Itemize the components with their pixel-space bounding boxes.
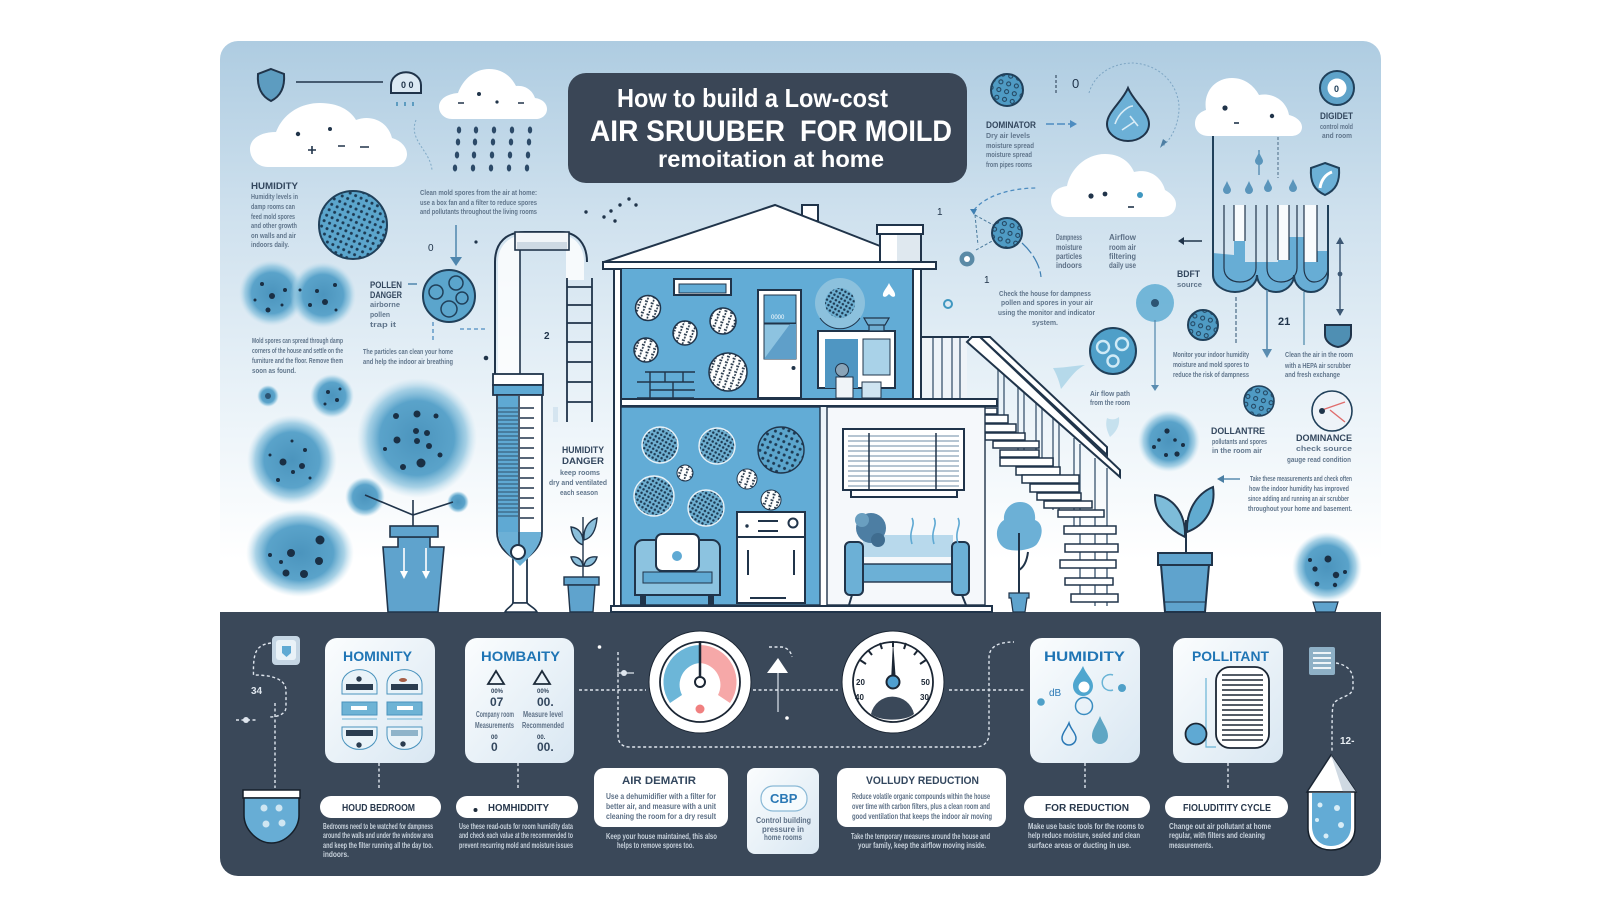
text: below volluty: your family, keep the airflow moving inside. [858,841,986,850]
text blocks: under spore clusters [252,336,453,375]
gauge: pressure dial: 20 [856,678,865,687]
icon: top-left device bottom band [272,636,300,665]
text: under pills left [323,822,573,859]
thermometer: 2 [544,331,550,342]
text block: pollen: POLLEN [370,280,402,290]
text block: top centre: and pollutants throughout the living rooms [420,207,537,216]
text block: centre right: Check the house for dampness [999,289,1091,298]
text blocks: pollutants right: DOLLANTRE [1211,426,1265,436]
mold circle and gauge icon right [1244,386,1352,431]
text columns centre right: Airflow [1109,233,1137,242]
title banner [568,73,967,183]
text blocks: under spore clusters: furniture and the floor. Remove them [252,356,343,365]
window with blinds [843,429,964,497]
door: 0000 [771,315,785,321]
text block: pollen: DANGER [370,290,402,300]
text block: humidity left: on walls and air [251,231,296,240]
small spores lower room [677,465,781,510]
card: hombaity readings: 00. [537,695,554,709]
shelf unit [818,318,895,398]
text columns centre right: moisture [1056,243,1082,252]
pollen spore circle [423,270,475,322]
house [603,205,1042,612]
gauge: pressure dial: 50 [921,678,930,687]
pill: for reduction [1024,796,1150,818]
potted plant left [365,495,453,612]
text block: top centre [420,188,537,216]
icon: ring top right: control mold [1320,122,1353,131]
text columns centre right: room air [1109,243,1136,252]
card: humidity drops: HUMIDITY [1044,648,1126,664]
text blocks: pollutants right: in the room air [1212,446,1262,455]
air duct pipe [495,232,587,378]
icon: water drop with arc [1089,63,1179,148]
lower left room [621,407,820,605]
text block: pollen: trap it [370,320,397,329]
text blocks: right: with a HEPA air scrubber [1284,361,1351,370]
arrow and text lower right: throughout your home and basement. [1248,504,1352,513]
text blocks: under spore clusters: soon as found. [252,366,296,375]
label BDFT: source [1177,280,1202,289]
text block: pollen: pollen [370,310,390,319]
gauge: pressure dial: 40 [855,693,864,702]
text: below air dematir [606,832,717,850]
card: hominity sensors [325,638,435,763]
text block: humidity left [251,181,298,249]
card: hombaity readings: 07 [490,695,504,709]
fuzzy spore on pot right [1292,532,1362,612]
card: hombaity readings: HOMBAITY [481,648,561,664]
blue dashes left [433,322,488,343]
arrow: up triangle [767,658,788,712]
icon: ring top right: and room [1322,131,1352,140]
icon: flask [1307,755,1356,850]
text blocks: right: Monitor your indoor humidity [1173,350,1250,359]
diagonal handrail bands [967,337,1120,477]
icon: beaker left [243,790,300,843]
icon: document [1309,647,1354,753]
text blocks: under spore clusters: corners of the house and settle on the [252,346,343,355]
card: hombaity readings: 00. [537,735,546,741]
text: under pills right [1028,822,1271,850]
text block: centre right: pollen and spores in your air [1001,298,1093,307]
icon: ring top right [1320,71,1354,140]
mold spore: large patterned [319,191,387,259]
text: under pills right: Make use basic tools for the rooms to [1028,822,1144,831]
card: volluty reduction: over time with carbon filters, plus a clean room and [852,802,990,811]
fuzzy mold spores lower left [246,374,477,597]
network diagram centre right: 1 [937,207,943,218]
card: air dematir: Use a dehumidifier with a filter for [606,792,716,801]
text block: humidity left: HUMIDITY [251,181,298,191]
small potted plant [564,517,599,612]
card: hombaity readings [465,638,574,763]
arrow: down to pollen: 0 [428,243,434,254]
dots near title [584,197,638,223]
text: under pills left: and keep the filter running all the day too. [323,841,433,850]
card: pollutant filter [1173,638,1283,763]
text blocks: right: Clean the air in the room [1285,350,1353,359]
card: CBP: home rooms [764,833,802,842]
card: air dematir [594,768,728,827]
water tubes [1213,136,1328,292]
base slab [611,606,992,612]
big potted plant [1155,487,1214,612]
text blocks: under spore clusters: Mold spores can spread through damp [252,336,343,345]
text block: humidity near thermometer: DANGER [562,456,605,466]
text columns centre right [1056,233,1137,270]
text blocks: pollutants right: pollutants and spores [1212,437,1267,446]
air vent [674,279,731,295]
text: under pills right: Change out air pollutant at home [1169,822,1271,831]
text blocks: right: Air flow path [1090,389,1130,398]
text block: humidity left: damp rooms can [251,202,295,211]
washer [737,512,805,603]
card: pollutant filter: POLLITANT [1192,648,1269,664]
spore blob with arrow [1136,284,1174,391]
text columns centre right: daily use [1109,261,1136,270]
title banner: FOR MOILD [800,115,952,148]
text: below volluty [851,832,990,850]
card: volluty reduction: Reduce volatile organic compounds within the house [852,792,990,801]
upper room [614,269,921,606]
gauge: humidity dial [649,631,751,733]
text block: humidity top [986,120,1077,169]
icon: ring top right: DIGIDET [1320,111,1353,121]
text block: humidity left: feed mold spores [251,212,295,221]
text: below air dematir: helps to remove spores too. [617,841,694,850]
pill: humidity: HOMHIDDITY [488,803,549,814]
text blocks: under spore clusters: and help the indoor air breathing [363,357,453,366]
balcony and balusters [921,338,1107,606]
text block: pollen [370,280,417,329]
armchair [635,534,720,605]
text block: top centre: use a box fan and a filter to reduce spores [420,198,537,207]
text: under pills right: help reduce moisture, sealed and clean [1028,831,1140,840]
card: hombaity readings: 0 [491,740,498,754]
lines below tubes: 21 [1278,316,1290,328]
cloud: small top with rain [439,69,547,172]
panel: sky background [220,41,1381,631]
text blocks: right: reduce the risk of dampness [1173,370,1249,379]
card: hombaity readings: Company room [476,710,514,719]
gauge: pressure dial [842,631,944,733]
small tree [997,502,1042,612]
text columns centre right: indoors [1056,261,1082,270]
text block: humidity top: moisture spread [986,141,1034,150]
text: under pills left: indoors. [323,850,349,859]
cloud: centre right [1051,154,1176,217]
text blocks: right: moisture and mold spores to [1173,360,1249,369]
icon: ring top right: 0 [1334,84,1339,94]
card: CBP: Control building [756,816,811,825]
text: below volluty: Take the temporary measures around the house and [851,832,990,841]
card: volluty reduction [837,768,1006,827]
text blocks: right: and fresh exchange [1285,370,1340,379]
pill: humidity cycle [1165,796,1288,818]
card: hombaity readings: 00% [491,689,504,695]
card: hombaity readings: 00% [537,689,550,695]
fuzzy spore right [1138,410,1200,472]
title banner: remoitation at home [658,146,884,172]
icon: blue circle top right group [991,74,1079,106]
gauge: pressure dial: 30 [920,693,929,702]
title banner: AIR SRUUBER [590,115,785,148]
arrow: down to pollen [428,225,478,266]
network diagram centre right [937,188,1041,308]
floor slab [621,399,997,406]
text: under pills left: prevent recurring mold and moisture issues [459,841,573,850]
text: under pills left: Use these read-outs for room humidity data [459,822,573,831]
arrows near tubes [1178,237,1344,316]
arrow and text lower right: Take these measurements and check often [1250,474,1352,483]
text: under pills left: and check each value at the recommended to [459,831,573,840]
card: hombaity readings: Measurements [475,721,514,730]
text block: humidity top: DOMINATOR [986,120,1036,130]
arrow and text lower right: how the indoor humidity has improved [1249,484,1349,493]
card: air dematir: better air, and measure with a unit [606,802,716,811]
panel: dark bottom band [220,612,1381,876]
text block: humidity near thermometer: HUMIDITY [562,445,604,455]
icon: shield and sensor top left [258,69,432,170]
mold patches upper room [634,296,747,391]
cloud: large left [250,103,407,167]
card: hombaity readings: Recommended [522,721,564,730]
arrow and text lower right [1217,474,1352,513]
text columns centre right: Dampness [1056,233,1082,242]
text blocks: under spore clusters: The particles can clean your home [363,347,453,356]
ladder [567,278,592,422]
leaf accents [1053,365,1119,437]
card: CBP [747,768,819,854]
text: under pills right: regular, with filters and cleaning [1169,831,1265,840]
lines below tubes [1236,290,1304,358]
icon: shield and sensor top left: 0 0 [401,80,414,90]
pill: for reduction: FOR REDUCTION [1045,803,1129,814]
door [758,290,801,398]
connector dashes left [236,643,286,788]
card: humidity drops: dB [1049,688,1062,699]
connectors right cards to pills [1085,763,1228,788]
pill: house bedroom [320,796,441,818]
text columns centre right: filtering [1109,252,1136,261]
text blocks: right [1090,350,1353,407]
text blocks: right: from the room [1090,398,1130,407]
brick wall [637,372,695,398]
large blue circle with rings [1090,328,1136,374]
icon: document: 12- [1340,736,1354,747]
card: CBP: CBP [770,791,798,806]
text blocks: pollutants right: DOMINANCE [1296,433,1352,443]
pill: humidity [456,796,578,818]
mold circles lower room [634,427,804,526]
arrow and text lower right: since adding and running an air scrubber [1248,494,1349,503]
stair treads [967,408,1118,602]
text block: humidity top: from pipes rooms [986,160,1032,169]
text block: pollen: airborne [370,300,400,309]
text block: humidity near thermometer: keep rooms [560,468,600,477]
text blocks: pollutants right: check source [1296,444,1352,453]
text block: centre right: using the monitor and indicator [998,308,1095,317]
connectors card to pill [379,763,518,788]
connector dashes centre [579,642,1026,747]
text block: centre right [998,289,1095,327]
card: hombaity readings: 00 [491,735,498,741]
title banner: How to build a Low-cost [617,83,888,113]
card: volluty reduction: good ventilation that keeps the indoor air moving [852,812,992,821]
pill: house bedroom: HOUD BEDROOM [342,803,415,814]
card: CBP: pressure in [762,825,804,834]
text: under pills left: Bedrooms need to be watched for dampness [323,822,433,831]
label BDFT: BDFT [1177,269,1200,279]
text: below air dematir: Keep your house maintained, this also [606,832,717,841]
lower right room [827,407,985,605]
network diagram centre right: 1 [984,275,990,286]
text block: centre right: system. [1032,318,1058,327]
cloud: top right [1195,78,1302,136]
text blocks: pollutants right: gauge read condition [1287,455,1351,464]
label BDFT [1177,269,1202,289]
text: under pills right: measurements. [1169,841,1213,850]
mold circle right small [1188,310,1218,340]
text block: humidity top: Dry air levels [986,131,1030,140]
card: hombaity readings: Measure level [523,710,563,719]
icon: small shield [1325,325,1351,347]
text block: humidity left: indoors daily. [251,240,289,249]
pill: humidity cycle: FIOLUDITITY CYCLE [1183,803,1271,814]
connector dashes left: 34 [251,686,263,697]
roof and chimneys [603,205,936,269]
fuzzy mold cluster left [239,260,356,328]
text block: humidity near thermometer: each season [560,488,598,497]
icon: blue circle top right group: 0 [1072,76,1079,91]
text: under pills left: around the walls and under the window area [323,831,433,840]
card: humidity drops [1030,638,1140,763]
text block: humidity left: and other growth [251,221,297,230]
card: volluty reduction: VOLLUDY REDUCTION [866,775,979,787]
text block: humidity left: Humidity levels in [251,192,298,201]
staircase [921,337,1120,606]
card: air dematir: AIR DEMATIR [622,775,696,787]
text block: humidity top: moisture spread [986,150,1032,159]
mold fuzzy upper room [815,278,895,329]
icon: shield right [1311,163,1339,195]
sofa [845,513,969,605]
text block: humidity near thermometer: dry and ventilated [549,478,607,487]
text columns centre right: particles [1056,252,1082,261]
text block: humidity near thermometer [549,445,607,497]
card: hombaity readings: 00. [537,740,554,754]
text: under pills right: surface areas or ducting in use. [1028,841,1131,850]
text block: top centre: Clean mold spores from the air at home: [420,188,537,197]
card: air dematir: cleaning the room for a dry result [606,812,716,821]
text blocks: pollutants right [1211,426,1352,464]
card: hominity sensors: HOMINITY [343,648,413,664]
thermometer [484,331,558,612]
